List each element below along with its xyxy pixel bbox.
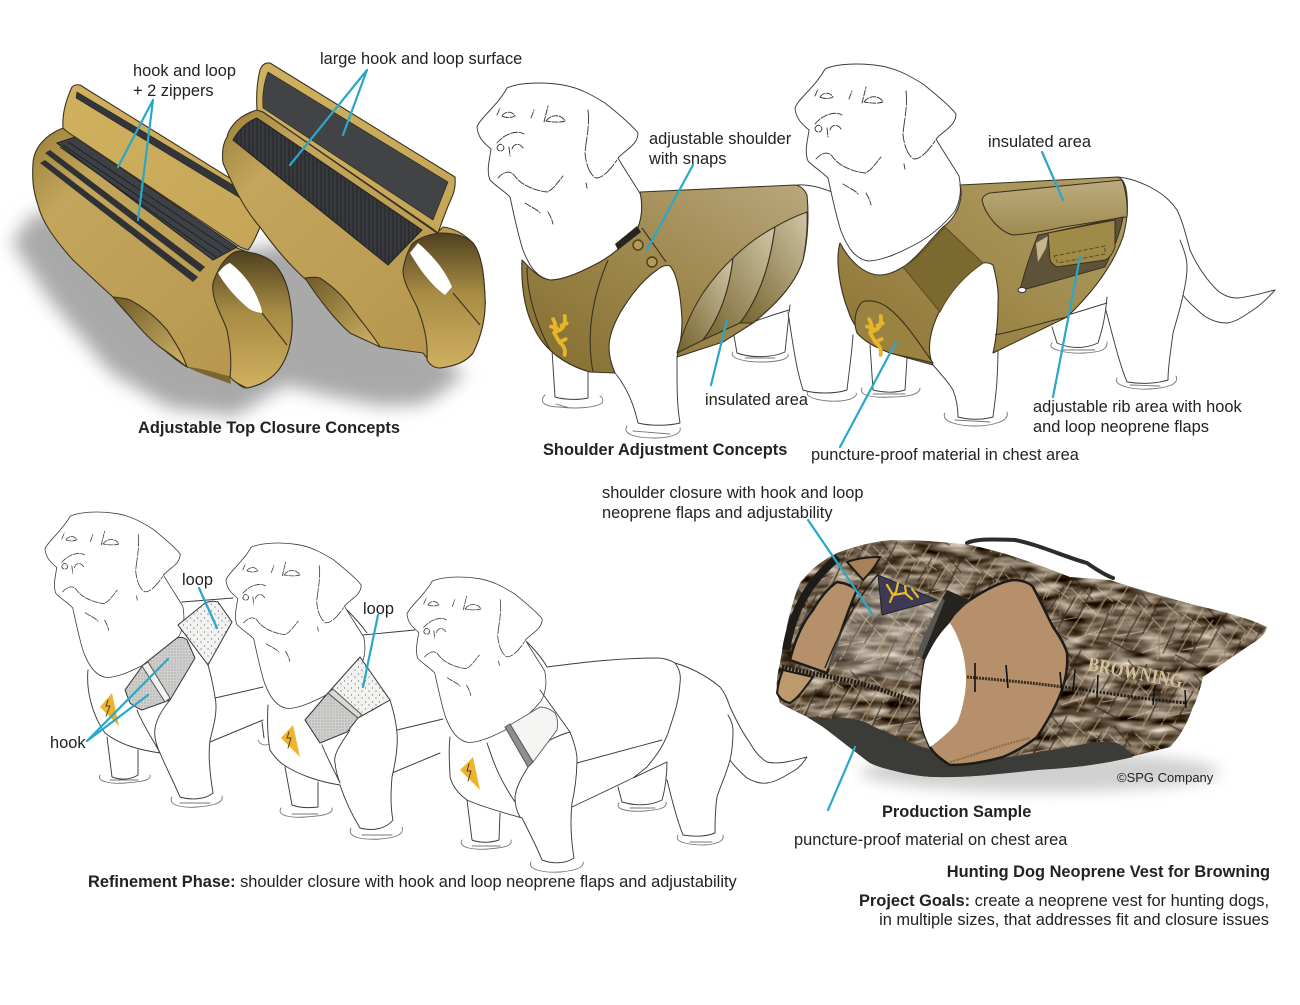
copyright: ©SPG Company [1117,770,1214,785]
label: hook and loop plus 2 zippers [133,62,236,100]
shoulder flap [510,707,558,762]
handle [967,539,1113,578]
callout lines: shoulder adjustment [647,152,1080,447]
near left leg [467,800,500,842]
chest vest [268,700,397,829]
loop patch [328,657,390,718]
fold-over flap [257,63,455,233]
insulated quilted panels [677,258,733,353]
label: shoulder closure: neoprene flaps and adjustability [602,504,833,522]
tail and haunch [1105,177,1275,383]
vest shell [838,177,1127,365]
dark neck rim [786,557,838,650]
neoprene edge stitching [782,667,917,703]
label: loop second dog: loop [363,600,394,618]
callout lines: refinement [87,588,378,741]
near left leg [107,737,138,779]
hook panel on body [233,118,422,265]
shoulder seams [527,228,666,372]
inner stitching [967,677,1063,687]
label: adjustable shoulder with snaps [648,130,792,168]
illustration: refinement dog B [226,543,443,839]
rear body [547,658,807,836]
opening interior [213,251,292,388]
illustration: hook and loop plus zippers vest [33,85,292,388]
text block: project goals: in multiple sizes, that addresses fit and closure issues [879,911,1269,929]
water ripples [861,342,1177,426]
leg hole [113,297,187,367]
loop panel on flap [263,72,448,220]
logo [281,725,300,757]
near left leg [285,767,318,808]
illustration: dog with rib area vest [795,64,1275,426]
dog 1 to dog 2 back line [797,185,832,192]
embroidered Browning wordmark: BROWNING [1086,653,1185,693]
label: adjustable rib area: adjustable rib area with hook [1033,398,1242,416]
hook strip on flap [76,92,258,207]
label: puncture-proof on chest area: puncture-proof material on chest area [794,831,1068,849]
illustration: refinement dog C [407,577,807,872]
head and neck [477,83,642,280]
white see-through gap [920,623,966,747]
ripples [461,802,723,872]
label: insulated area lower: insulated area [705,391,809,409]
label: adjustable rib area [1033,398,1242,436]
head and neck [45,512,184,678]
black puncture-proof chest panel [807,717,1133,777]
text block: project goals: Project Goals: create a neoprene vest for hunting dogs, [859,892,1269,910]
ripples [280,808,402,839]
zipper panel [57,137,237,260]
hook strips [45,150,205,272]
head and neck [407,577,546,742]
tan lining of arm opening [920,580,1067,765]
tan neck openings [790,582,857,673]
rib opening with neoprene flaps [1018,217,1123,292]
near front left leg [870,345,907,392]
label: shoulder closure: shoulder closure with hook and loop [602,484,864,502]
camo body [776,540,1267,778]
label: shoulder closure [602,484,864,522]
antler logo [551,316,567,355]
label: loop first dog: loop [182,571,213,589]
hook patch [125,637,195,710]
label: adjustable shoulder with snaps: with snaps [648,150,726,168]
vest shell [522,185,808,373]
illustration: production sample camo vest [776,538,1267,778]
fold-over flap [63,85,265,250]
insulated flap [982,180,1127,235]
chest vest [88,665,216,799]
heading: adjustable top closure concepts: Adjustable Top Closure Concepts [138,419,400,437]
label: hook: hook [50,734,86,752]
far hind leg [618,762,667,805]
text block: project goals [859,892,1269,929]
callout lines: production sample [808,520,873,810]
lower vest seam [995,317,1067,335]
illustration: refinement dog A [45,512,264,807]
label: hook and loop plus 2 zippers: + 2 zippers [133,82,214,100]
browning triangle patch [878,575,937,615]
heading: shoulder adjustment concepts: Shoulder Adjustment Concepts [543,441,787,459]
ripples [99,775,222,807]
hook patch [305,693,358,743]
far hind leg [1052,297,1107,348]
body lines [182,598,264,742]
arm opening gap [218,263,262,313]
body shell [222,110,485,368]
near hind leg [788,312,853,393]
label: puncture-proof in chest area: puncture-proof material in chest area [811,446,1080,464]
label: adjustable shoulder with snaps: adjustable shoulder [649,130,792,148]
head and neck [795,64,960,261]
chest puncture-proof panel [855,301,933,363]
illustration: dog with snap shoulder vest [477,83,856,438]
label: hook and loop plus 2 zippers: hook and loop [133,62,236,80]
loop patch [178,601,232,665]
head and neck [226,543,365,708]
body shell [33,128,292,388]
label: large hook and loop surface: large hook and loop surface [320,50,522,68]
shoulder closure panel [825,572,945,682]
adjustable shoulder band [903,227,983,312]
antler logo [867,316,883,355]
pocket flap [1048,220,1115,267]
front leg [615,357,680,425]
caption: refinement phase: Refinement Phase: shoulder closure with hook and loop neoprene flaps and adjustability [88,873,738,891]
leg hole [305,277,380,347]
logo [100,693,119,726]
bottom trim [187,367,231,384]
illustration: large hook and loop surface vest [222,63,485,368]
label: insulated area top: insulated area [988,133,1092,151]
front leg [933,345,998,419]
shadow: top closure concepts [12,212,465,416]
arm opening gap [410,243,452,295]
adjustment strap [505,724,533,767]
shadow: production sample [860,752,1220,792]
far hind leg [733,305,790,357]
water ripples [542,352,856,438]
collar clip [615,226,641,250]
callout lines: top closure [118,70,367,220]
dark strap beside arm opening [916,590,970,660]
chest and arm vest [449,732,577,863]
snap buttons [633,240,657,267]
heading: production sample: Production Sample [882,803,1031,821]
back-left leg [552,350,588,399]
label: adjustable rib area: and loop neoprene flaps [1033,418,1209,436]
logo [460,757,480,790]
opening interior [403,233,485,368]
heading: project title: Hunting Dog Neoprene Vest for Browning [947,863,1270,881]
body lines [363,630,443,773]
